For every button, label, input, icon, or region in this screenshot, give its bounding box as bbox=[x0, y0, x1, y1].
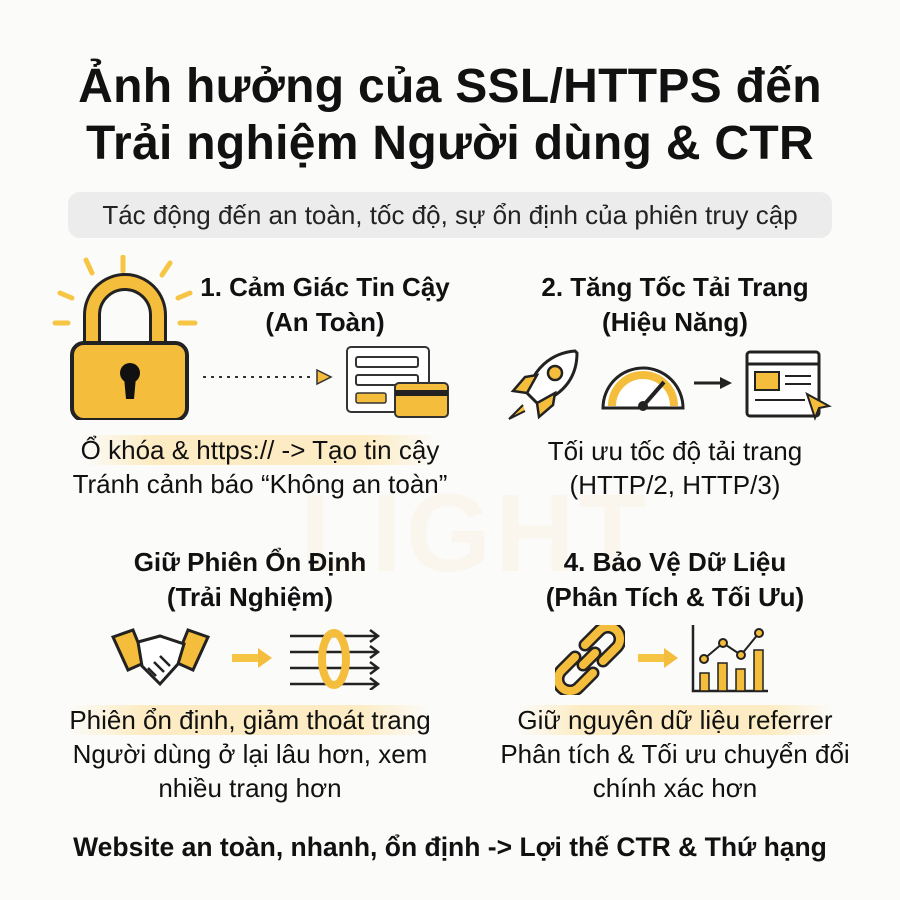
heading 4: 4. Bảo Vệ Dữ Liệu bbox=[564, 547, 786, 577]
text 4: Giữ nguyên dữ liệu referrer bbox=[517, 705, 833, 735]
text 3: nhiều trang hơn bbox=[158, 773, 342, 803]
text 1: Ổ khóa & https:// -> Tạo tin cậy bbox=[81, 435, 439, 465]
text 1: Tránh cảnh báo “Không an toàn” bbox=[73, 469, 447, 499]
text 1 bbox=[73, 435, 447, 499]
footer: Website an toàn, nhanh, ổn định -> Lợi thế CTR & Thứ hạng bbox=[73, 832, 827, 862]
heading 2 bbox=[541, 272, 809, 337]
heading 4 bbox=[546, 547, 804, 612]
title: Ảnh hưởng của SSL/HTTPS đến bbox=[78, 60, 822, 113]
text 2 bbox=[548, 436, 802, 500]
subtitle pill: Tác động đến an toàn, tốc độ, sự ổn định của phiên truy cập bbox=[102, 200, 798, 230]
text 4: chính xác hơn bbox=[593, 773, 757, 803]
arrow 4 bbox=[638, 648, 678, 668]
icon: padlock bbox=[52, 255, 198, 420]
heading 2: (Hiệu Năng) bbox=[602, 307, 748, 337]
arrow 3 bbox=[232, 648, 272, 668]
heading 1: (An Toàn) bbox=[265, 307, 385, 337]
text 2: (HTTP/2, HTTP/3) bbox=[570, 470, 780, 500]
heading 2: 2. Tăng Tốc Tải Trang bbox=[541, 272, 809, 302]
heading 3: (Trải Nghiệm) bbox=[167, 582, 333, 612]
icon: chart bbox=[692, 625, 768, 692]
icon: browser bbox=[746, 350, 832, 421]
arrow 2 bbox=[694, 377, 732, 389]
icon: ssl links flow bbox=[290, 629, 380, 690]
icon: chain bbox=[555, 625, 625, 695]
text 4 bbox=[500, 705, 850, 803]
heading 3: Giữ Phiên Ổn Định bbox=[134, 547, 366, 577]
icon: rocket bbox=[508, 350, 578, 420]
heading 4: (Phân Tích & Tối Ưu) bbox=[546, 582, 804, 612]
text 3 bbox=[69, 705, 431, 803]
arrow: dotted bbox=[203, 368, 332, 386]
text 4: Phân tích & Tối ưu chuyển đổi bbox=[500, 739, 850, 769]
title bbox=[78, 58, 822, 170]
text 3: Người dùng ở lại lâu hơn, xem bbox=[73, 739, 427, 769]
watermark: LIGHT bbox=[300, 472, 650, 595]
title: Trải nghiệm Người dùng & CTR bbox=[86, 117, 814, 170]
heading 1 bbox=[200, 272, 450, 337]
icon: form and card bbox=[346, 346, 449, 418]
text 3: Phiên ổn định, giảm thoát trang bbox=[69, 705, 431, 735]
heading 1: 1. Cảm Giác Tin Cậy bbox=[200, 272, 450, 302]
heading 3 bbox=[134, 547, 366, 612]
subtitle pill bbox=[68, 192, 832, 238]
icon: handshake bbox=[111, 628, 210, 686]
text 2: Tối ưu tốc độ tải trang bbox=[548, 436, 802, 466]
icon: gauge bbox=[602, 366, 684, 411]
